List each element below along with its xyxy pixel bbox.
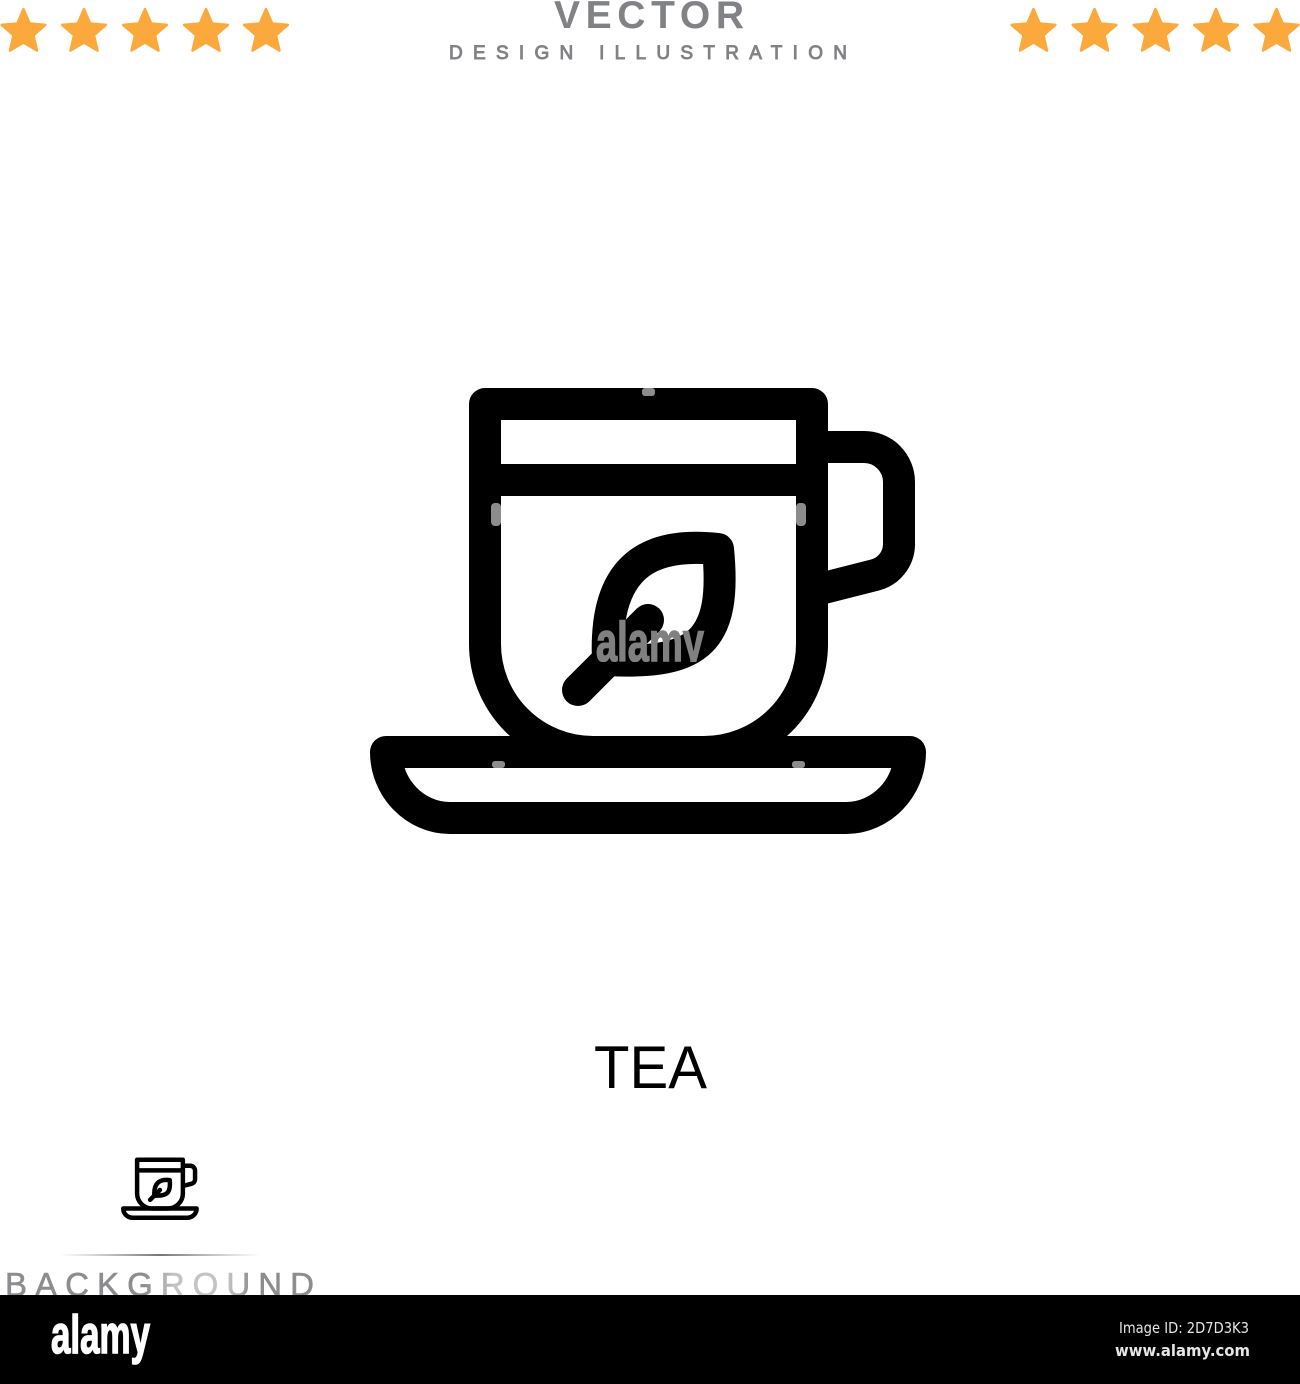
footer logo: alamy: alamy — [51, 1305, 150, 1365]
watermark: alamy over leaf: alamy — [596, 610, 704, 673]
rating stars: right — [1012, 9, 1298, 51]
icon: tea cup with leaf on saucer — [386, 404, 910, 818]
footer bar — [0, 1295, 1300, 1384]
footer website: www.alamy.com — [1115, 1341, 1250, 1360]
divider line — [60, 1254, 260, 1256]
saucer — [386, 752, 910, 818]
cup body — [485, 404, 812, 752]
rating stars: left — [2, 9, 288, 51]
cup handle — [812, 447, 899, 591]
tea leaf — [608, 548, 720, 661]
icon: small tea cup thumbnail — [123, 1160, 197, 1218]
subheading: DESIGN ILLUSTRATION: DESIGN ILLUSTRATION — [449, 43, 847, 64]
label: BACKGROUND: BACKGROUND — [5, 1266, 314, 1303]
cup liquid line — [485, 464, 812, 496]
footer image id: Image ID: 2D7D3K3 — [1119, 1319, 1249, 1337]
leaf stem — [578, 620, 648, 690]
watermark fragments on icon — [491, 388, 806, 768]
icon title: TEA: TEA — [594, 1034, 707, 1101]
